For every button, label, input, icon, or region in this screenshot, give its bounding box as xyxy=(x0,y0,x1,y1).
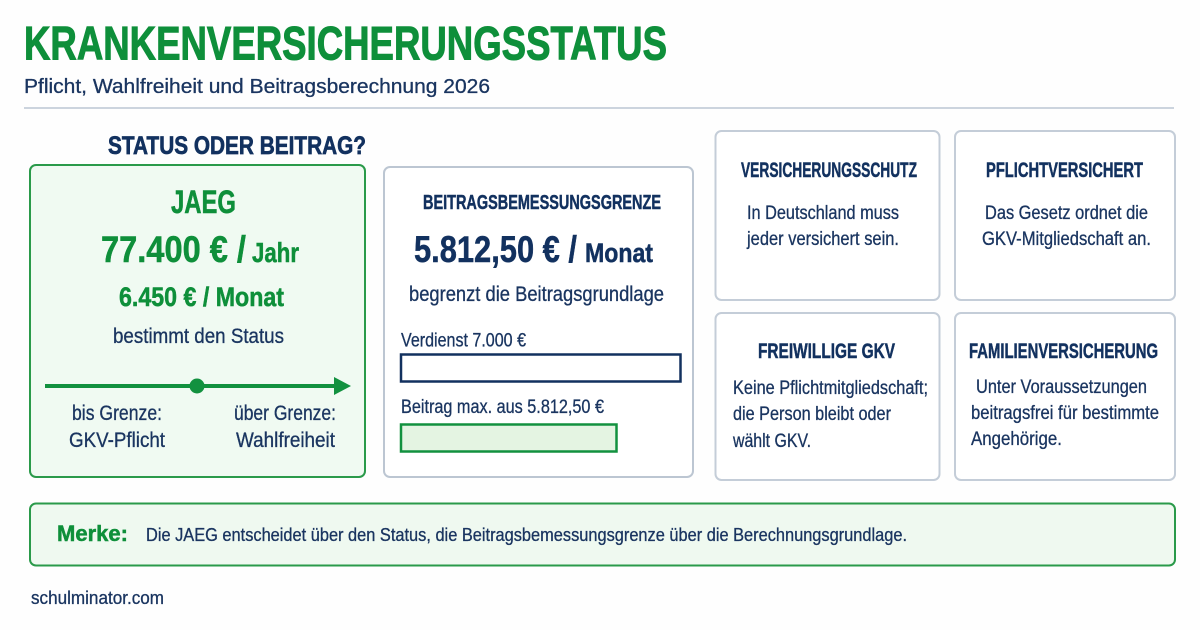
below threshold label: GKV-Pflicht xyxy=(69,429,165,452)
card: Freiwillige GKV: Keine Pflichtmitgliedschaft; xyxy=(733,378,928,399)
card: Familienversicherung: Unter Voraussetzungen xyxy=(976,377,1147,398)
above threshold label: Wahlfreiheit xyxy=(236,429,335,452)
callout: Merke xyxy=(30,504,1175,566)
card: Freiwillige GKV: FREIWILLIGE GKV xyxy=(758,340,895,363)
panel: JAEG xyxy=(30,165,365,477)
panel heading: BEITRAGSBEMESSUNGSGRENZE xyxy=(423,192,661,214)
card: Familienversicherung xyxy=(955,313,1175,480)
below threshold label xyxy=(69,402,165,452)
card: Versicherungsschutz: In Deutschland muss xyxy=(747,203,899,224)
card: Freiwillige GKV: wählt GKV. xyxy=(732,431,811,452)
source: schulminator.com xyxy=(31,588,164,608)
title: KRANKENVERSICHERUNGSSTATUS xyxy=(24,16,667,70)
contribution bar xyxy=(401,424,616,452)
above threshold label: über Grenze: xyxy=(234,402,336,425)
panel: Beitragsbemessungsgrenze xyxy=(384,167,693,477)
threshold arrow xyxy=(45,377,351,395)
earnings label: Verdienst 7.000 € xyxy=(401,330,526,352)
card: Versicherungsschutz xyxy=(716,131,940,300)
card: Pflichtversichert: Das Gesetz ordnet die xyxy=(985,203,1148,224)
contribution label: Beitrag max. aus 5.812,50 € xyxy=(401,397,604,418)
above threshold label xyxy=(234,402,336,452)
JAEG heading: JAEG xyxy=(171,184,236,220)
monthly value: 6.450 € / Monat xyxy=(119,282,284,312)
contribution ceiling value: 5.812,50 € / xyxy=(414,229,577,270)
contribution ceiling value: Monat xyxy=(585,238,653,268)
ceiling note: begrenzt die Beitragsgrundlage xyxy=(409,283,664,306)
earnings bar xyxy=(401,354,680,382)
card: Familienversicherung: beitragsfrei für bestimmte xyxy=(971,403,1159,424)
annual value: Jahr xyxy=(252,237,299,268)
card: Pflichtversichert: GKV-Mitgliedschaft an. xyxy=(982,229,1151,250)
card: Versicherungsschutz: VERSICHERUNGSSCHUTZ xyxy=(741,159,917,182)
section heading: STATUS ODER BEITRAG? xyxy=(108,132,366,160)
card: Familienversicherung: Angehörige. xyxy=(971,429,1062,450)
annual value: 77.400 € / xyxy=(101,229,246,270)
card: Versicherungsschutz: jeder versichert sein. xyxy=(746,229,899,250)
below threshold label: bis Grenze: xyxy=(72,402,162,425)
card: Freiwillige GKV: die Person bleibt oder xyxy=(733,404,892,425)
callout: Merke: Die JAEG entscheidet über den Status, die Beitragsbemessungsgrenze über die Berechnungsgrundlage. xyxy=(146,525,907,545)
status note: bestimmt den Status xyxy=(113,325,284,348)
subtitle: Pflicht, Wahlfreiheit und Beitragsberechnung 2026 xyxy=(24,76,490,98)
card: Pflichtversichert xyxy=(955,131,1175,300)
card: Freiwillige GKV xyxy=(716,313,940,480)
callout: Merke: Merke: xyxy=(57,521,128,546)
